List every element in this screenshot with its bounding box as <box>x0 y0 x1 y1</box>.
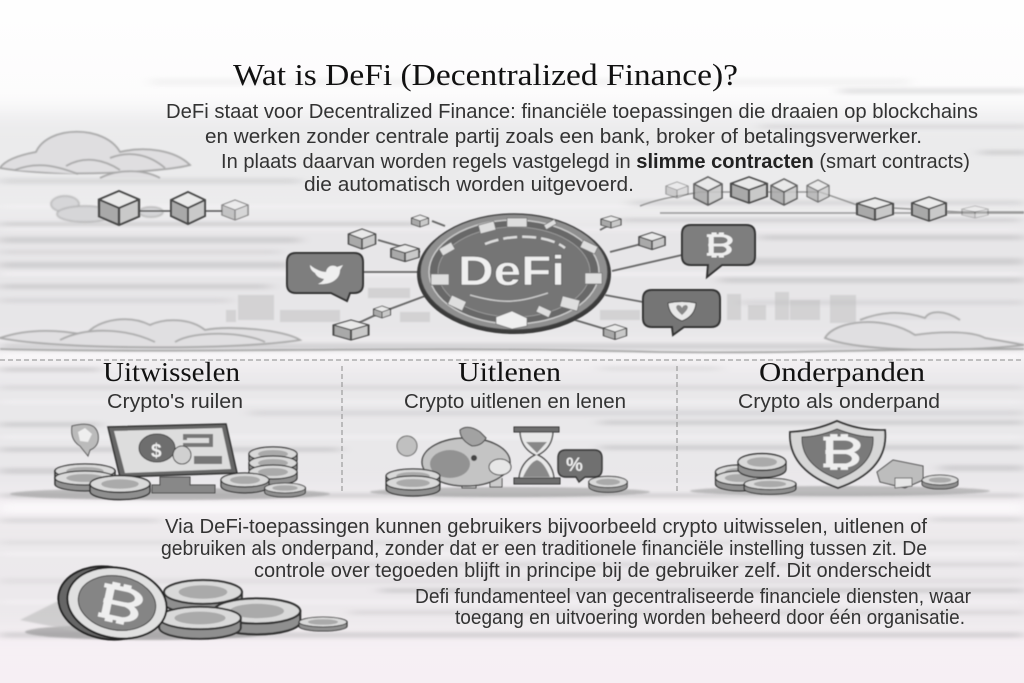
intro text: en werken zonder centrale partij zoals een bank, broker of betalingsverwerker. <box>205 126 922 148</box>
bottom text: controle over tegoeden blijft in principe bij de gebruiker zelf. Dit onderscheidt <box>254 560 931 582</box>
bottom text: Via DeFi-toepassingen kunnen gebruikers bijvoorbeeld crypto uitwisselen, uitlenen of <box>165 516 927 538</box>
faint city skyline <box>226 288 856 323</box>
bird bubble <box>287 253 363 301</box>
dashed dividers <box>0 360 1024 493</box>
column: Uitwisselen: Crypto's ruilen <box>107 391 243 413</box>
column: Uitlenen <box>370 357 650 497</box>
column: Onderpanden: Crypto als onderpand <box>738 391 940 413</box>
bottom text: gebruiken als onderpand, zonder dat er een traditionele financiële instelling tussen zit. De <box>161 538 927 560</box>
DeFi coin <box>417 214 611 334</box>
clouds bottom of hero <box>0 312 1024 352</box>
icon: bitcoin with coin stack <box>20 559 347 647</box>
column: Onderpanden <box>690 357 990 496</box>
column: Uitwisselen: Uitwisselen <box>103 357 241 387</box>
column: Onderpanden: Onderpanden <box>759 357 926 387</box>
column: Uitlenen: Crypto uitlenen en lenen <box>404 391 626 413</box>
bottom text: Defi fundamenteel van gecentraliseerde financiele diensten, waar <box>415 586 971 608</box>
bottom text: toegang en uitvoering worden beheerd door één organisatie. <box>455 607 965 629</box>
intro text: DeFi staat voor Decentralized Finance: financiële toepassingen die draaien op blockchains <box>166 101 978 123</box>
column: Uitwisselen <box>10 357 330 500</box>
bottom text <box>161 516 971 629</box>
intro text: die automatisch worden uitgevoerd. <box>304 174 634 196</box>
icon: monitor with coins: $ <box>151 441 162 462</box>
icon: shield with bitcoin and coins <box>690 421 990 496</box>
cubes chain right <box>640 177 1024 221</box>
title: Wat is DeFi (Decentralized Finance)? <box>233 57 738 92</box>
icon: piggy bank, hourglass, percent bubble <box>370 427 650 497</box>
DeFi label: DeFi <box>458 247 565 294</box>
heart shield bubble <box>643 290 720 335</box>
small clouds and cubes left <box>51 191 248 225</box>
icon: piggy bank, hourglass, percent bubble: % <box>566 455 583 476</box>
icon: monitor with coins <box>10 424 330 500</box>
connector lines <box>354 221 682 332</box>
intro text: In plaats daarvan worden regels vastgelegd in slimme contracten (smart contracts) <box>221 151 970 173</box>
clouds top left <box>0 132 190 178</box>
intro text <box>166 101 978 196</box>
column: Uitlenen: Uitlenen <box>458 357 562 387</box>
bitcoin bubble <box>682 225 755 277</box>
node cubes around DeFi coin <box>334 215 665 340</box>
